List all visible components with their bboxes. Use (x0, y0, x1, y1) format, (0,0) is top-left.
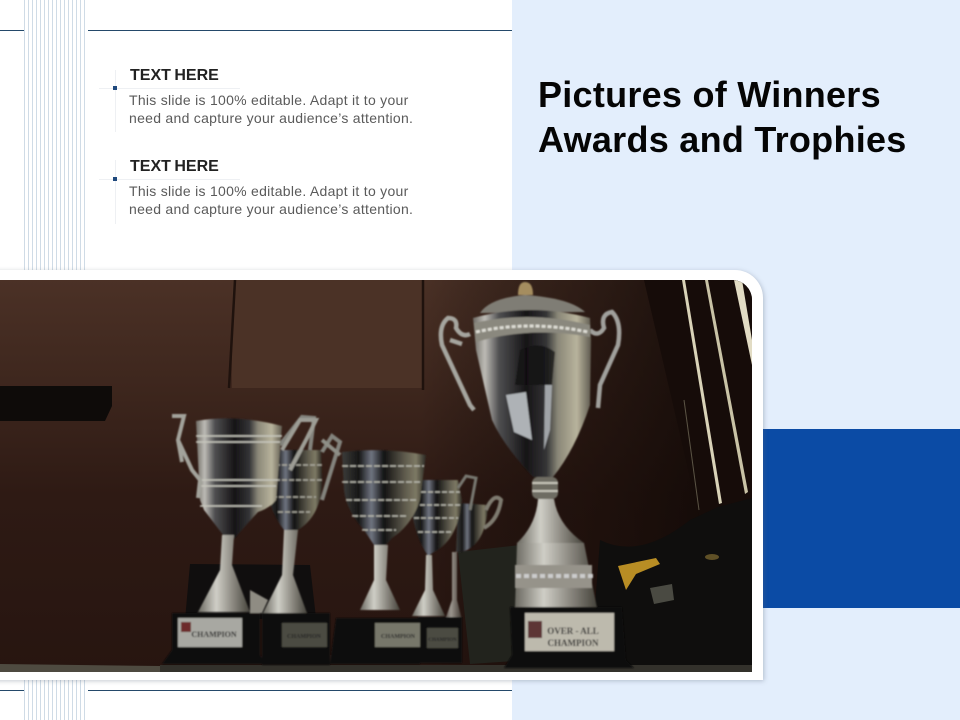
panel: white photo frame (0, 270, 763, 680)
green-grey box (458, 545, 530, 664)
trophy 2 (262, 417, 340, 665)
wall background (0, 280, 752, 672)
trophy 2: CHAMPION (287, 634, 322, 640)
body text: second item (129, 183, 413, 217)
decorative stripes and rules (0, 0, 512, 720)
black base (504, 607, 634, 668)
black box behind small trophies (185, 564, 316, 620)
trophy 4 (411, 476, 476, 663)
main trophy (441, 282, 634, 668)
right handle (590, 312, 619, 408)
title (538, 74, 907, 160)
panel: blue accent band (760, 429, 960, 608)
heading: first item: TEXT HERE (130, 67, 219, 84)
text block: first item (113, 86, 117, 90)
trophy 5 (445, 498, 501, 620)
trophy 3: CHAMPION (381, 634, 416, 640)
left handle (441, 318, 474, 410)
text block: second item (113, 177, 117, 181)
base cylinder (515, 543, 597, 608)
body text: first item: This slide is 100% editable. Adapt it to your (129, 92, 409, 108)
body text: second item: need and capture your audience’s attention. (129, 201, 413, 217)
shelf edge (0, 664, 160, 672)
dark shelf on the wall (0, 386, 112, 421)
photo: trophies on a shelf (0, 280, 752, 672)
plaque: CHAMPION (548, 638, 599, 648)
body text: first item: need and capture your audience’s attention. (129, 110, 413, 126)
bag at bottom right (590, 498, 752, 672)
heading: second item: TEXT HERE (130, 158, 219, 175)
knop (532, 477, 558, 499)
title: Awards and Trophies (538, 119, 907, 160)
finial and lid (518, 282, 533, 295)
trophy 1: CHAMPION (191, 630, 237, 639)
cup bowl (473, 310, 591, 477)
trophy 3 (322, 440, 426, 664)
trophy 1 (162, 416, 316, 664)
plaque (525, 613, 614, 651)
icon: first bullet square (113, 86, 117, 90)
window blinds at right (644, 280, 752, 520)
plaque: OVER - ALL (547, 626, 599, 636)
panel: right pale blue background (512, 0, 960, 720)
body text: second item: This slide is 100% editable. Adapt it to your (129, 183, 409, 199)
body text: first item (129, 92, 413, 126)
title: Pictures of Winners (538, 74, 881, 115)
trophy 4: CHAMPION (428, 638, 457, 643)
icon: second bullet square (113, 177, 117, 181)
foot (517, 499, 584, 543)
